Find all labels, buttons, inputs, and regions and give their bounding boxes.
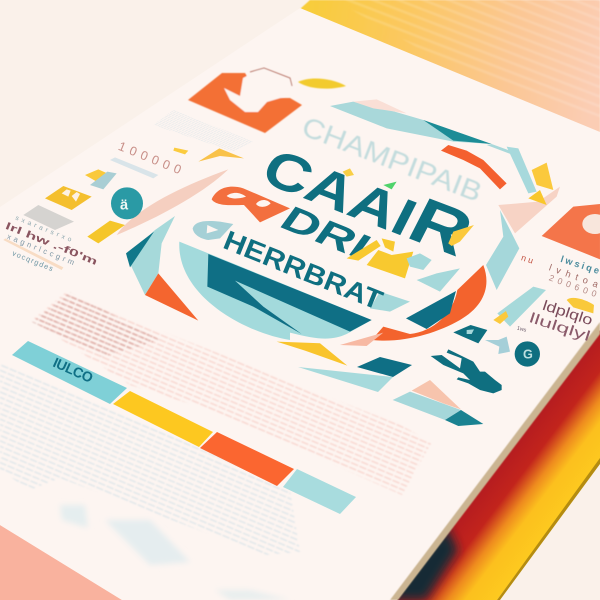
right orange card	[542, 204, 600, 259]
faint text block	[153, 110, 253, 152]
faint caption	[110, 157, 158, 178]
button play glyph	[207, 225, 218, 233]
yellow tip	[493, 311, 508, 324]
color bar	[12, 341, 356, 514]
dark tip	[445, 410, 483, 426]
central illustration	[117, 99, 513, 366]
blue label row: xagnrlccgrm	[6, 232, 76, 267]
digits row: 100000	[116, 139, 183, 177]
subheading: HERRBRAT: HERRBRAT	[219, 224, 387, 316]
blurred footer blocks	[60, 505, 290, 600]
card silhouette	[224, 68, 292, 112]
yellow tile	[85, 169, 107, 182]
bar label: IULCO	[51, 354, 96, 386]
peach wedge	[340, 333, 383, 346]
top orange image card	[188, 68, 302, 133]
light stripe	[497, 287, 546, 327]
dark label row: lrl hw .-f0'm	[4, 221, 99, 268]
yellow tiles	[528, 163, 553, 205]
green accent	[383, 182, 397, 189]
icon: teal circle	[111, 187, 143, 219]
yellow accent right	[448, 225, 474, 246]
peach triangle	[412, 380, 461, 409]
bowl shape	[179, 242, 372, 340]
yellow lower shard	[277, 342, 347, 366]
orange face mark	[212, 187, 290, 222]
dark teal wedge	[406, 291, 456, 329]
faded top text: CHAMPIPAIB	[298, 111, 486, 208]
bar light segment	[283, 469, 356, 514]
yellow leaf	[298, 79, 346, 89]
light band	[393, 392, 461, 420]
orange squiggle	[441, 145, 507, 189]
dark small text 2: 1ws	[516, 325, 527, 334]
yellow accent	[343, 168, 354, 177]
right side illustration	[453, 147, 600, 367]
digit row: lvhtoa	[548, 262, 600, 290]
right light teal shard	[486, 210, 519, 290]
icon: light arrow	[485, 337, 510, 354]
paper edge	[390, 322, 600, 600]
yellow shard	[198, 148, 244, 162]
top teal ribbon	[330, 99, 513, 155]
yellow letter cluster	[347, 238, 413, 278]
icon: dark badge	[453, 325, 487, 343]
left shards	[126, 216, 198, 321]
icon: teal circle: ä	[120, 197, 129, 213]
yellow oval	[567, 298, 594, 313]
heading: CAAIR: CAAIR	[252, 128, 484, 270]
left column illustration	[3, 110, 253, 273]
yellow tile lower	[87, 221, 125, 243]
card highlight	[582, 214, 600, 234]
bar orange segment	[200, 432, 294, 486]
dark lead text lines	[32, 292, 160, 357]
bottom left salmon sheet	[0, 525, 122, 600]
light teal tiles	[370, 253, 460, 312]
bar teal segment	[12, 341, 127, 404]
light tile	[90, 172, 117, 189]
bar yellow segment	[113, 391, 213, 447]
dark text row: llulqlyl	[527, 309, 593, 344]
yellow crown chart	[45, 186, 92, 210]
blue text block	[0, 362, 300, 555]
small yellow mark	[173, 148, 188, 154]
small label text: n u	[520, 252, 535, 266]
icon: circle: G	[523, 348, 533, 362]
lower right group	[393, 349, 502, 426]
silhouette outline	[250, 68, 292, 86]
grey panel	[23, 205, 74, 230]
icon: dark squiggle	[431, 349, 502, 393]
teal label: vocqrgdes	[11, 248, 55, 273]
pink text block	[32, 293, 432, 495]
right orange arc	[372, 265, 486, 341]
bottom right colored sheet	[385, 330, 600, 600]
peach wedge	[498, 187, 560, 233]
dark small text: ldplqlo	[541, 297, 595, 328]
top right yellow sheet	[290, 0, 600, 135]
caption line: sxararsrxo	[14, 215, 73, 244]
peach line	[3, 238, 63, 270]
lower wedge pieces	[298, 357, 412, 392]
light teal button	[193, 221, 233, 240]
digit row 2: 200600	[548, 272, 598, 299]
peach diagonal leaf	[117, 169, 228, 235]
icon: circle	[515, 341, 540, 367]
subheading: DRI: DRI	[273, 199, 379, 266]
thin teal strip	[507, 147, 537, 193]
small label text top: lwsiqe	[559, 254, 600, 276]
